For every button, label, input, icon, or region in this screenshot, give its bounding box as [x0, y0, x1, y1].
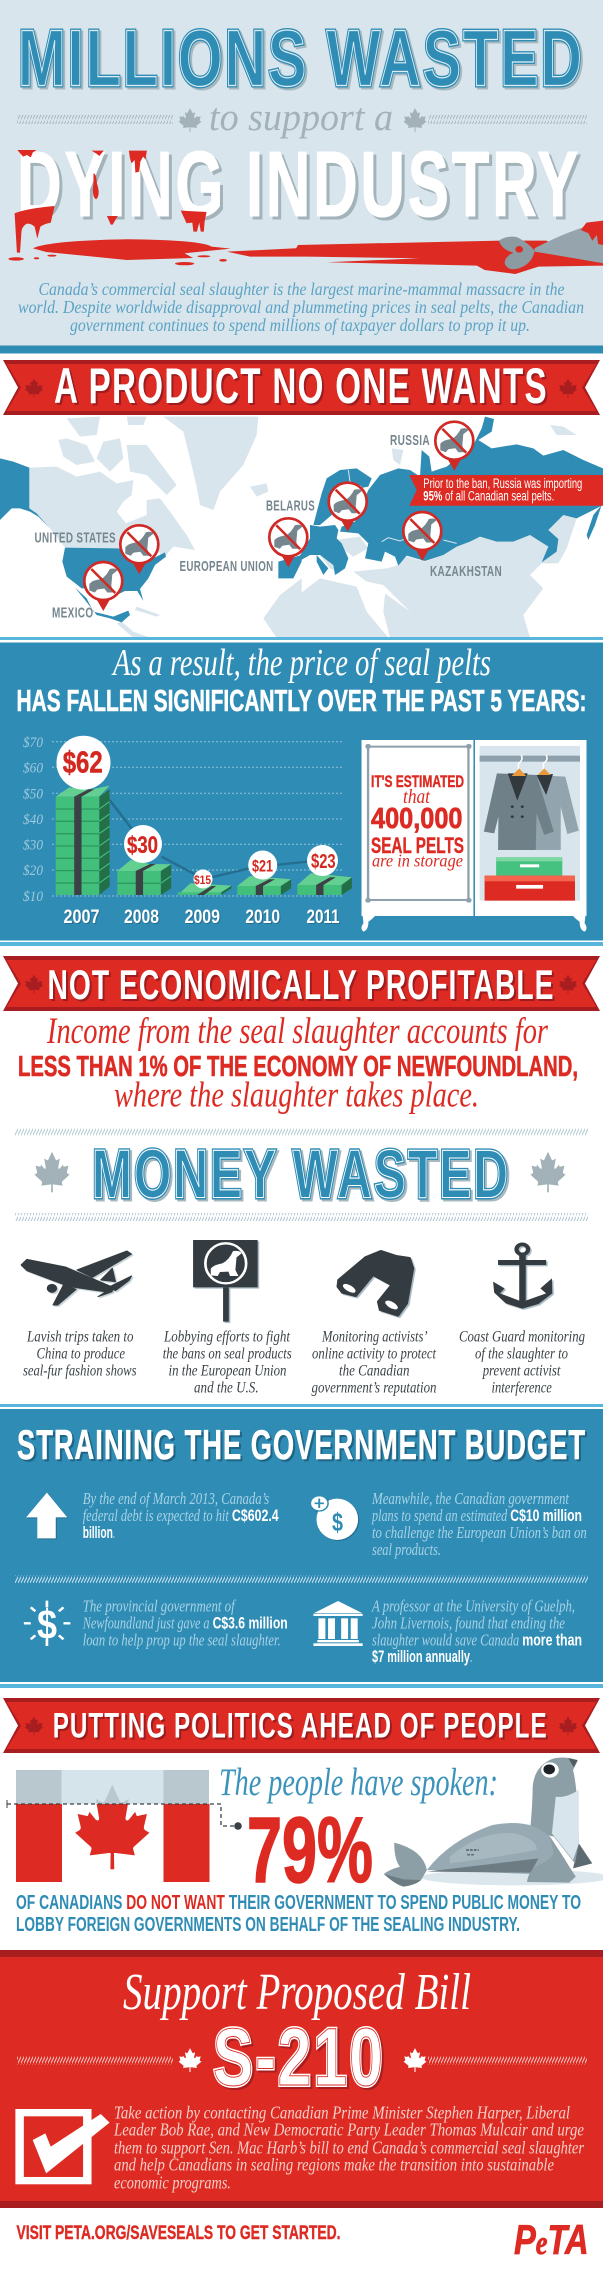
icon: up arrow	[26, 1493, 67, 1538]
text: c$10 million: plans to spend an estimated C$10 million	[371, 1506, 582, 1525]
footer call to action: VISIT PETA.ORG/SAVESEALS TO GET STARTED.	[16, 2222, 340, 2244]
text: monitoring activists: government’s reputation	[312, 1380, 437, 1397]
text: federal debt: federal debt is expected to hit C$602.4	[83, 1506, 279, 1525]
year labels: 2009	[185, 907, 220, 928]
text: c$10 million: seal products.	[372, 1540, 441, 1559]
79 percent statistic: 79%	[247, 1798, 373, 1902]
axis labels: $40	[23, 812, 43, 828]
panel: straining the government budget	[0, 1404, 603, 1688]
callout: russia imports	[409, 475, 603, 506]
map labels	[34, 432, 502, 622]
icon: anchor	[493, 1244, 552, 1309]
year labels	[64, 907, 340, 928]
map labels: RUSSIA	[390, 432, 430, 449]
text: lavish trips: Lavish trips taken to	[26, 1329, 134, 1346]
item icons	[21, 1240, 552, 1322]
bill number: s-210: S-210	[213, 2012, 385, 2103]
year labels: 2007	[64, 907, 100, 928]
pin: kazakhstan	[403, 512, 441, 561]
item text	[23, 1329, 585, 1397]
storage text: SEAL PELTS	[371, 833, 464, 858]
text: lobbying: in the European Union	[168, 1363, 287, 1380]
axis labels: $50	[23, 786, 43, 802]
spain	[278, 555, 302, 578]
heading	[16, 642, 586, 718]
illustration: seal	[384, 1758, 603, 1887]
text: monitoring activists: the Canadian	[339, 1363, 410, 1380]
intro paragraph	[18, 279, 584, 335]
money stack 2007	[56, 786, 110, 895]
text: federal debt	[83, 1489, 279, 1542]
text: coast guard: of the slaughter to	[475, 1345, 568, 1362]
text: c$3.6 million: Newfoundland just gave a C$3.6 million	[82, 1613, 288, 1632]
western hemisphere	[0, 417, 302, 638]
text: federal debt: billion.	[83, 1523, 115, 1542]
alaska	[0, 458, 50, 528]
suitcases	[485, 857, 575, 901]
pin: mexico	[84, 562, 122, 611]
european union	[298, 525, 348, 575]
text: coast guard: interference	[492, 1380, 552, 1397]
trend line	[110, 800, 308, 877]
divider	[17, 2048, 587, 2072]
value bubbles: $62	[63, 744, 103, 780]
money stack 2008	[117, 860, 171, 895]
bar chart	[23, 735, 352, 928]
text: lavish trips: China to produce	[36, 1345, 125, 1362]
text: $7 million annually: $7 million annually.	[372, 1647, 473, 1666]
statement: less than 1%: where the slaughter takes place.	[114, 1075, 479, 1115]
map labels: KAZAKHSTAN	[430, 563, 502, 580]
value bubbles: $21	[252, 857, 273, 876]
panel: the people have spoken	[7, 1758, 603, 1936]
text: lobbying: the bans on seal products	[163, 1345, 292, 1362]
icon: check box	[20, 2113, 110, 2181]
text: $7 million annually: slaughter would save Canada more than	[372, 1630, 582, 1649]
money stack 2009	[178, 883, 232, 895]
text: c$10 million	[371, 1489, 587, 1559]
dollar glyph with rays: $	[37, 1601, 57, 1648]
storage text: IT'S ESTIMATED	[371, 773, 464, 791]
text: c$3.6 million	[82, 1597, 288, 1649]
icon: bank	[313, 1601, 363, 1646]
icon: lobbying sign	[193, 1240, 258, 1322]
money stack 2010	[237, 876, 291, 895]
axis labels: $70	[23, 735, 43, 751]
value bubbles: $30	[127, 832, 158, 859]
year labels: 2011	[306, 907, 340, 928]
statement: less than 1%	[18, 1011, 578, 1115]
storage text: 400,000	[371, 803, 462, 835]
canadian flag graphic	[7, 1770, 242, 1882]
map labels: UNITED STATES	[34, 530, 116, 546]
value bubbles: $23	[311, 851, 336, 873]
scandinavia	[313, 468, 372, 525]
continental united states	[62, 548, 166, 601]
icon: binoculars	[338, 1251, 413, 1316]
world map panel	[0, 417, 603, 638]
storage text	[371, 773, 464, 871]
text: federal debt: By the end of March 2013, Canada’s	[83, 1489, 269, 1508]
heading: support proposed bill: Support Proposed Bill	[123, 1964, 471, 2021]
pin: belarus	[329, 483, 367, 532]
panel: price of seal pelts	[0, 637, 603, 946]
text: lobbying: and the U.S.	[194, 1380, 259, 1397]
intro paragraph: government continues to spend millions of taxpayer dollars to prop it up.	[70, 315, 530, 335]
text: $7 million annually	[371, 1597, 582, 1666]
text: monitoring activists: Monitoring activists’	[321, 1329, 428, 1346]
map labels: MEXICO	[52, 604, 94, 622]
mexico	[75, 588, 130, 622]
storage text: are in storage	[372, 851, 463, 871]
coats	[484, 755, 579, 850]
axis labels: $60	[23, 760, 43, 776]
storage text: that	[403, 786, 430, 808]
text: lobbying	[163, 1329, 292, 1397]
map labels: EUROPEAN UNION	[180, 558, 274, 575]
callout: russia imports: 95% of all Canadian seal pelts.	[423, 488, 554, 504]
axis labels: $10	[23, 889, 43, 905]
bill number: s-210: S-210	[213, 2012, 385, 2103]
icon: coin plus	[310, 1496, 358, 1540]
header panel	[0, 0, 603, 354]
wardrobe	[362, 740, 587, 932]
text: monitoring activists	[312, 1329, 437, 1397]
people have spoken heading: The people have spoken:	[219, 1761, 498, 1804]
icon: dollar rays	[24, 1601, 70, 1646]
pin: united states	[120, 525, 158, 574]
call to action text	[113, 2102, 584, 2192]
panel: support proposed bill	[0, 1950, 603, 2208]
axis labels: $20	[23, 863, 43, 879]
dollar glyph on coin: $	[332, 1507, 343, 1537]
text: coast guard	[459, 1329, 585, 1397]
text: lobbying: Lobbying efforts to fight	[163, 1329, 291, 1346]
text: lavish trips	[23, 1329, 136, 1380]
pin: russia	[435, 422, 473, 471]
text: c$3.6 million: loan to help prop up the seal slaughter.	[83, 1630, 281, 1649]
year labels: 2008	[124, 907, 159, 928]
eastern hemisphere	[298, 417, 603, 638]
text: coast guard: prevent activist	[482, 1363, 561, 1380]
russia and kazakhstan	[340, 417, 603, 566]
icon: airplane	[21, 1251, 132, 1305]
subtitle divider: to support a: to support a	[209, 96, 393, 139]
blood drips and pool	[8, 150, 603, 274]
text: lavish trips: seal-fur fashion shows	[23, 1363, 136, 1380]
subtitle divider: to support a	[17, 96, 587, 139]
text: monitoring activists: online activity to protect	[312, 1345, 437, 1362]
map labels: BELARUS	[266, 498, 315, 514]
call to action text: economic programs.	[114, 2172, 231, 2192]
axis labels	[23, 735, 43, 905]
seal tail	[499, 221, 603, 269]
value bubbles	[56, 736, 338, 888]
pin: european union	[269, 518, 307, 567]
statement: canadians do not want	[16, 1892, 581, 1936]
logo: peta: PeTA	[514, 2216, 589, 2263]
banner: putting politics ahead of people	[3, 1698, 600, 1753]
axis labels: $30	[23, 838, 43, 854]
money stack 2011	[297, 873, 352, 895]
year labels: 2010	[245, 907, 280, 928]
panel: money wasted items	[21, 1240, 585, 1397]
text: c$3.6 million: The provincial government of	[83, 1597, 237, 1616]
value bubbles: $15	[194, 873, 211, 887]
